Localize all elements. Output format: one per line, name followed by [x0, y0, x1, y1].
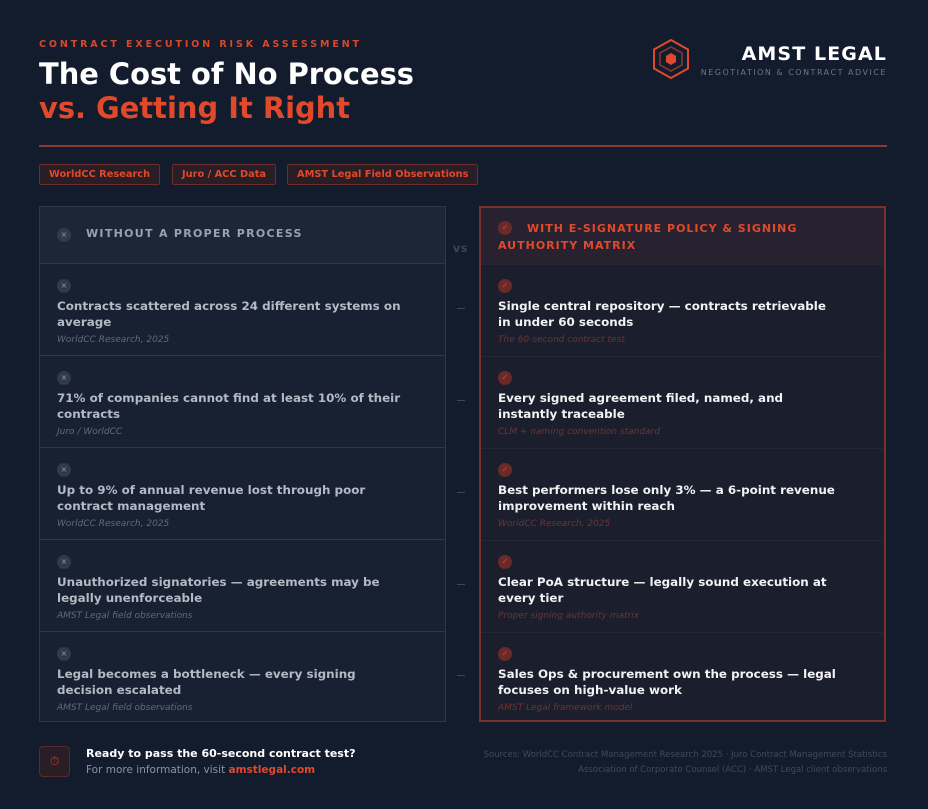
- tag: AMST: [287, 164, 478, 185]
- row 3: Up to 9% of annual revenue lost through poor contract management: [57, 483, 365, 513]
- right header: WITH E-SIGNATURE POLICY & SIGNING AUTHORITY MATRIX: [498, 222, 797, 252]
- row 4: [40, 539, 445, 631]
- row 1: [40, 263, 445, 355]
- left header: WITHOUT A PROPER PROCESS: [86, 227, 303, 240]
- footer CTA: [39, 746, 356, 777]
- row 2: [40, 355, 445, 447]
- icon: hexagon: [653, 38, 689, 80]
- sources: Sources: WorldCC Contract Management Research 2025 · Juro Contract Management Statistics: [484, 750, 887, 760]
- sources: Association of Corporate Counsel (ACC) · AMST Legal client observations: [578, 765, 887, 775]
- row 3: [481, 448, 884, 540]
- CTA heading: Ready to pass the 60-second contract test?: [86, 747, 356, 760]
- row 4: ×: [61, 557, 67, 566]
- row 3: [40, 447, 445, 539]
- row 2: ✓: [502, 373, 508, 382]
- title: The Cost of No Process: [39, 57, 414, 91]
- tag: WorldCC: WorldCC Research: [49, 169, 150, 180]
- sources: [484, 750, 887, 775]
- brand tagline: NEGOTIATION & CONTRACT ADVICE: [701, 68, 887, 77]
- brand name: AMST LEGAL: [742, 43, 887, 65]
- row 2: Juro / WorldCC: [57, 427, 122, 437]
- row 1: Single central repository — contracts retrievable in under 60 seconds: [498, 299, 826, 329]
- row 5: [40, 631, 445, 723]
- row 5: AMST Legal field observations: [57, 703, 192, 713]
- brand logo: [653, 38, 887, 80]
- row 3: WorldCC Research, 2025: [57, 519, 169, 529]
- row 2: ×: [61, 373, 67, 382]
- row 3: WorldCC Research, 2025: [498, 519, 610, 529]
- row 5: Sales Ops & procurement own the process — legal focuses on high-value work: [498, 667, 836, 697]
- row 2: Every signed agreement filed, named, and instantly traceable: [498, 391, 783, 421]
- row 5: AMST Legal framework model: [498, 703, 632, 713]
- row 2: 71% of companies cannot find at least 10% of their contracts: [57, 391, 400, 421]
- row 4: Unauthorized signatories — agreements may be legally unenforceable: [57, 575, 380, 605]
- row 1: Contracts scattered across 24 different systems on average: [57, 299, 401, 329]
- left header: [40, 207, 445, 263]
- title: [39, 57, 414, 125]
- row 1: [481, 264, 884, 356]
- icon: timer: [39, 746, 70, 777]
- title: vs. Getting It Right: [39, 91, 350, 125]
- row 5: [481, 632, 884, 724]
- divider: [39, 145, 887, 147]
- row 2: [481, 356, 884, 448]
- right header: ✓: [502, 223, 508, 232]
- row 4: AMST Legal field observations: [57, 611, 192, 621]
- row 1: ✓: [502, 281, 508, 290]
- kicker: CONTRACT EXECUTION RISK ASSESSMENT: [39, 39, 362, 50]
- tag: AMST: AMST Legal Field Observations: [297, 169, 468, 180]
- row 3: ✓: [502, 465, 508, 474]
- row 2: CLM + naming convention standard: [498, 427, 660, 437]
- row 1: The 60-second contract test: [498, 335, 625, 345]
- row 4: [481, 540, 884, 632]
- tag: Juro: [172, 164, 276, 185]
- row 1: ×: [61, 281, 67, 290]
- panel: with e-signature: [479, 206, 886, 722]
- connectors: [457, 308, 465, 309]
- row 5: ✓: [502, 649, 508, 658]
- panel: without process: [39, 206, 446, 722]
- tag: WorldCC: [39, 164, 160, 185]
- left header: ×: [61, 230, 67, 239]
- icon: timer: ⏱: [50, 754, 59, 768]
- tag: Juro: Juro / ACC Data: [182, 169, 266, 180]
- right header: [481, 208, 884, 264]
- row 5: ×: [61, 649, 67, 658]
- row 4: Proper signing authority matrix: [498, 611, 639, 621]
- row 4: ✓: [502, 557, 508, 566]
- row 3: ×: [61, 465, 67, 474]
- row 3: Best performers lose only 3% — a 6-point revenue improvement within reach: [498, 483, 835, 513]
- vs label: VS: [453, 245, 468, 255]
- CTA link: For more information, visit amstlegal.com: [86, 764, 315, 776]
- row 1: WorldCC Research, 2025: [57, 335, 169, 345]
- row 4: Clear PoA structure — legally sound execution at every tier: [498, 575, 827, 605]
- row 5: Legal becomes a bottleneck — every signing decision escalated: [57, 667, 356, 697]
